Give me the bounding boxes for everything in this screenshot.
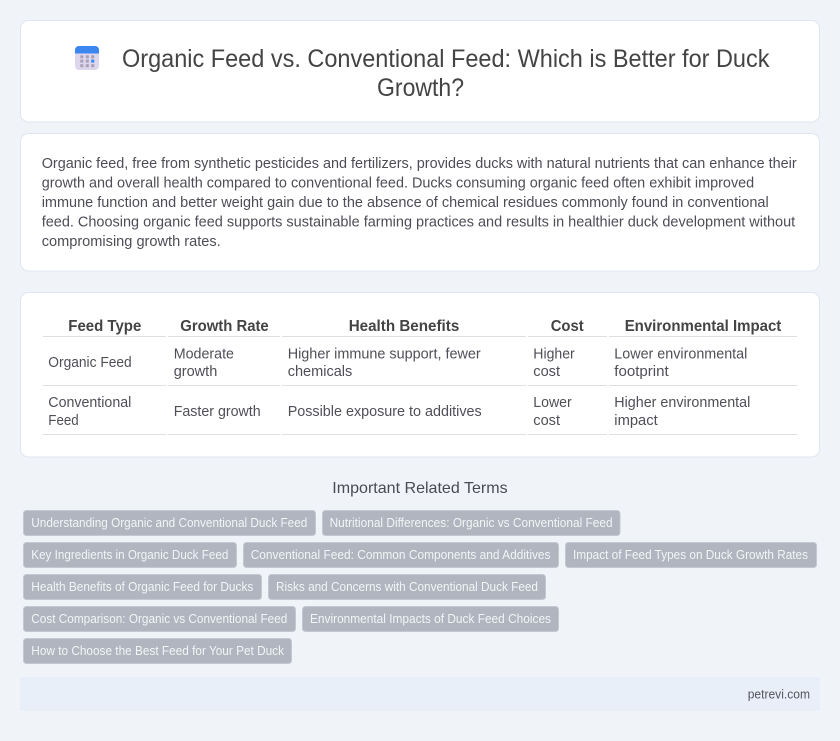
table header row: Health Benefits <box>349 318 460 335</box>
tag: environmental impacts: Environmental Impacts of Duck Feed Choices <box>310 612 551 626</box>
tag: how to choose <box>24 638 292 664</box>
tag: nutritional differences: Nutritional Differences: Organic vs Conventional Feed <box>330 516 613 530</box>
table row: conventional feed: Faster growth <box>174 404 261 420</box>
title: Growth? <box>377 75 464 102</box>
text block: introduction paragraph: feed. Choosing organic feed supports sustainable farming practices and results in healthier duck development without <box>42 215 795 231</box>
panel: comparison table <box>20 292 820 457</box>
table row: organic feed: Organic Feed <box>48 355 132 371</box>
heading: important related terms: Important Related Terms <box>332 480 508 497</box>
table row: conventional feed: Conventional <box>48 395 131 411</box>
tag: conventional feed components <box>244 542 558 568</box>
table header row <box>43 318 797 337</box>
table row: conventional feed: Higher environmental <box>614 395 750 411</box>
tag: conventional feed components: Conventional Feed: Common Components and Additives <box>251 548 550 562</box>
footer bar <box>20 677 820 711</box>
tag: cost comparison <box>24 606 296 632</box>
text block: introduction paragraph: Organic feed, free from synthetic pesticides and fertilizers, provides ducks with natural nutrients that can enhance their <box>42 156 797 172</box>
table header row: Feed Type <box>68 318 142 335</box>
table row: organic feed: chemicals <box>288 364 352 380</box>
tag: nutritional differences <box>322 510 620 536</box>
icon: calendar grid <box>75 46 99 70</box>
tag: impact of feed types <box>566 542 816 568</box>
title <box>122 46 770 102</box>
tag: cost comparison: Cost Comparison: Organic vs Conventional Feed <box>31 612 287 626</box>
tag: environmental impacts <box>302 606 558 632</box>
panel: important related terms <box>24 480 816 664</box>
table row: organic feed: footprint <box>614 364 669 380</box>
tag: understanding organic and conventional duck feed: Understanding Organic and Conventional Duck Feed <box>31 516 307 530</box>
table header row: Growth Rate <box>180 318 269 335</box>
tag: understanding organic and conventional duck feed <box>24 510 316 536</box>
title: Organic Feed vs. Conventional Feed: Which is Better for Duck <box>122 46 770 73</box>
table row: conventional feed: impact <box>614 413 658 429</box>
table row: organic feed: Moderate <box>174 346 234 362</box>
tag: health benefits: Health Benefits of Organic Feed for Ducks <box>31 580 253 594</box>
text block: introduction paragraph: growth and overall health compared to conventional feed. Ducks consuming organic feed often exhibit improved <box>42 176 754 192</box>
panel: introduction <box>20 134 820 271</box>
table row: organic feed: Higher <box>533 346 575 362</box>
table row: conventional feed: cost <box>533 413 560 429</box>
table row: conventional feed <box>43 395 797 435</box>
table row: conventional feed: Feed <box>48 413 79 429</box>
table row: organic feed: cost <box>533 364 560 380</box>
tag: key ingredients: Key Ingredients in Organic Duck Feed <box>31 548 228 562</box>
text block: introduction paragraph: compromising growth rates. <box>42 234 221 250</box>
table row: organic feed: Lower environmental <box>614 346 747 362</box>
tag: impact of feed types: Impact of Feed Types on Duck Growth Rates <box>573 548 808 562</box>
tag: risks and concerns: Risks and Concerns with Conventional Duck Feed <box>276 580 538 594</box>
tag: health benefits <box>24 574 262 600</box>
text block: introduction paragraph: immune function and better weight gain due to the absence of chemical residues commonly found in conventional <box>42 195 769 211</box>
tag: key ingredients <box>24 542 236 568</box>
text block: introduction paragraph <box>42 156 797 250</box>
footer source text: petrevi.com <box>748 687 810 702</box>
panel: header <box>20 20 820 122</box>
table header row: Cost <box>551 318 584 335</box>
tag: risks and concerns <box>268 574 546 600</box>
table row: organic feed: growth <box>174 364 217 380</box>
table row: conventional feed: Lower <box>533 395 572 411</box>
table row: organic feed: Higher immune support, fewer <box>288 346 481 362</box>
table row: conventional feed: Possible exposure to additives <box>288 404 482 420</box>
table header row: Environmental Impact <box>625 318 782 335</box>
tag: how to choose: How to Choose the Best Feed for Your Pet Duck <box>31 644 285 658</box>
table row: organic feed <box>43 346 797 386</box>
